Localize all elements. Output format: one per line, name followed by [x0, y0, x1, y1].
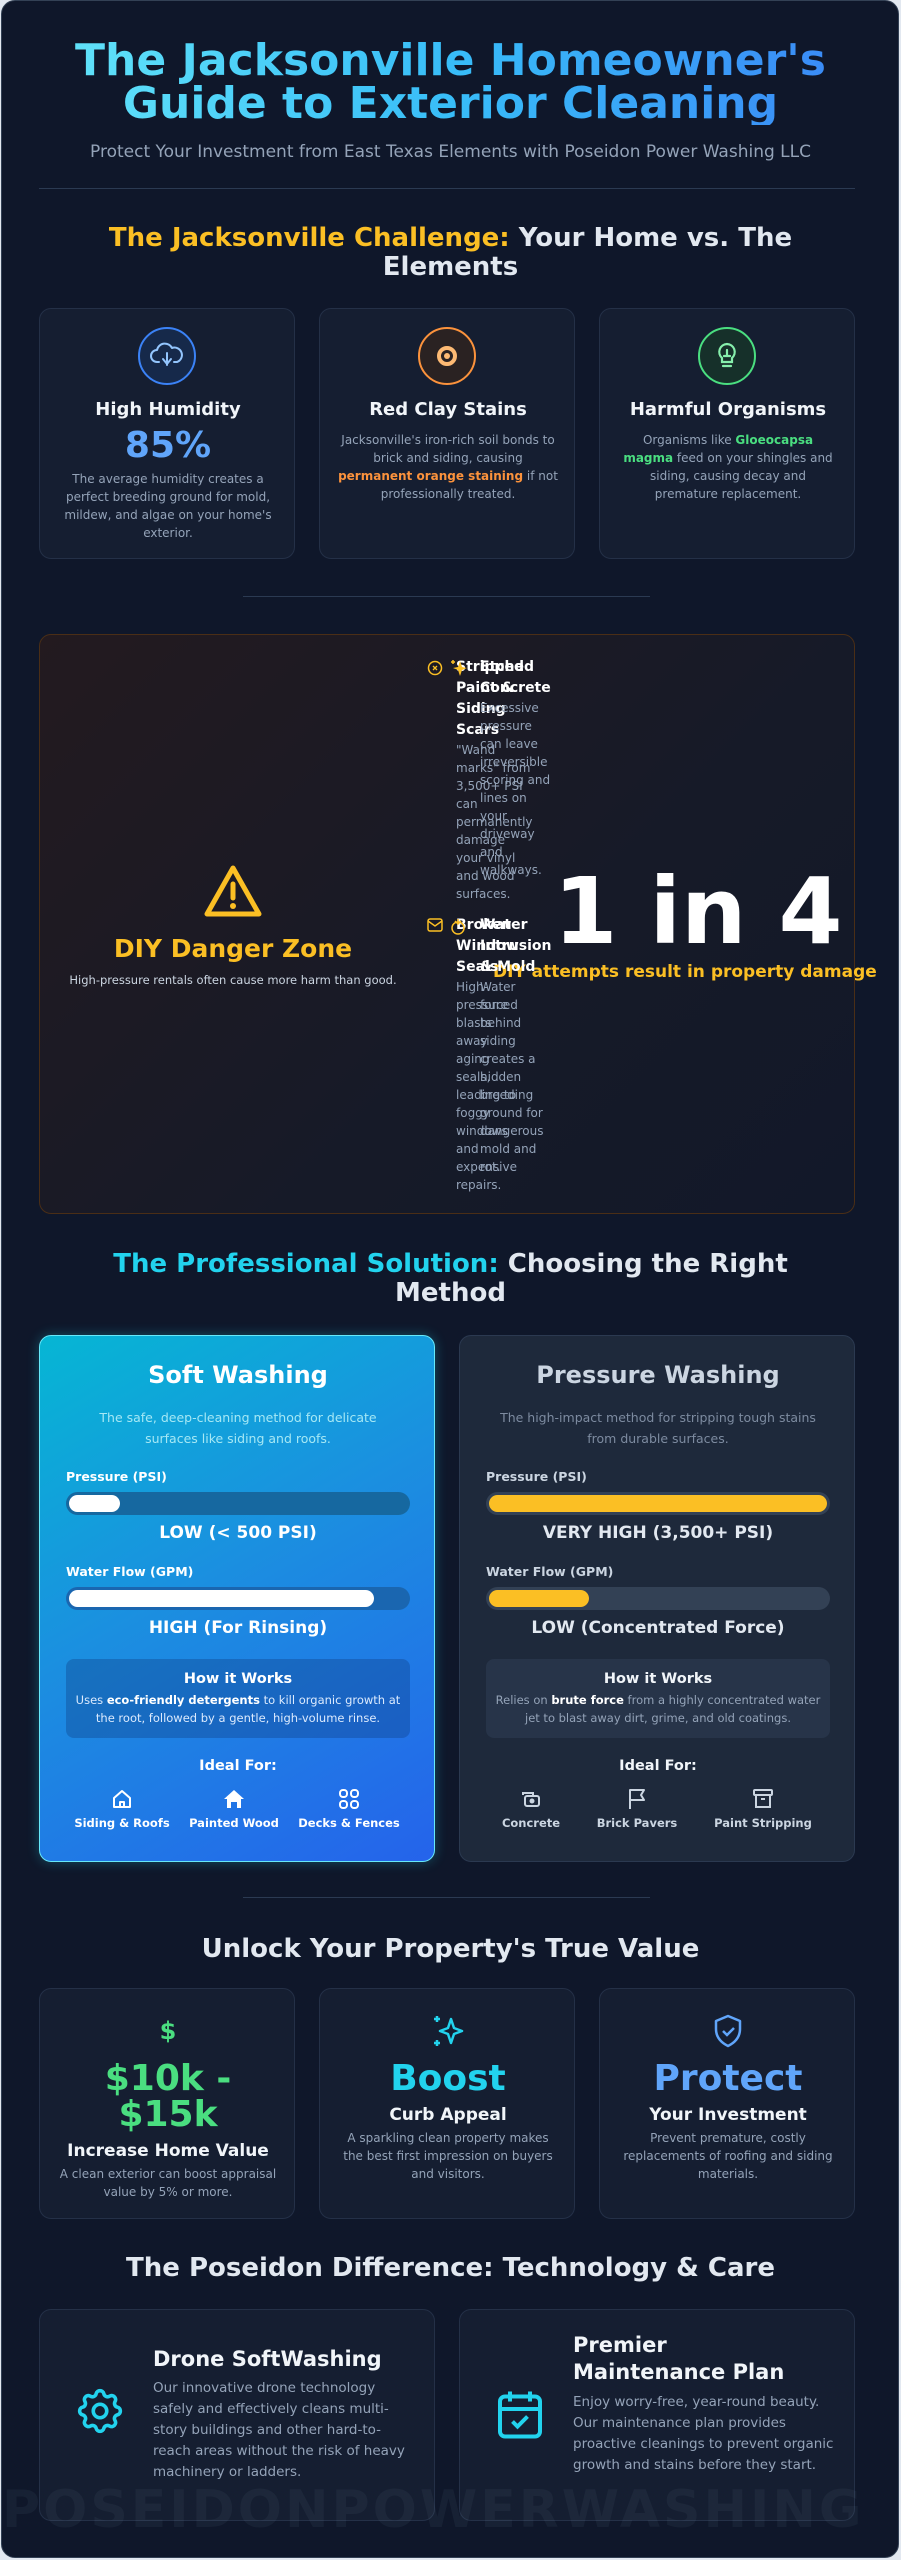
stat: Boost	[390, 2058, 506, 2099]
item: etched concrete	[451, 659, 551, 877]
stat caption: DIY attempts result in property damage	[493, 962, 877, 982]
panel: DIY danger zone	[39, 634, 855, 1214]
icon: sparkle	[451, 660, 467, 676]
water flow meter: Water Flow (GPM)	[486, 1564, 613, 1579]
icon: painted wood	[189, 1790, 279, 1830]
item: etched concrete: Excessive pressure can leave irreversible scoring and lines on your driveway and walkways.	[480, 701, 550, 877]
stat: Protect	[653, 2058, 803, 2099]
item: water intrusion: Water Intrusion & Mold	[480, 917, 551, 975]
icon: shield	[714, 2014, 742, 2048]
stat: $10k -	[105, 2058, 231, 2099]
water flow meter	[66, 1564, 410, 1638]
item: broken window seals: Broken Window Seals	[456, 917, 519, 975]
icon: siding & roofs	[74, 1790, 170, 1830]
pressure meter: VERY HIGH (3,500+ PSI)	[543, 1523, 773, 1543]
panel: pressure washing	[459, 1335, 855, 1862]
water flow meter	[486, 1564, 830, 1638]
description: The average humidity creates a perfect breeding ground for mold, mildew, and algae on your home's exterior.	[64, 472, 272, 540]
stat	[105, 2058, 231, 2135]
description: The high-impact method for stripping tough stains from durable surfaces.	[500, 1410, 816, 1446]
how it works box: How it Works	[604, 1671, 712, 1687]
title: Pressure Washing	[536, 1361, 780, 1389]
title: Increase Home Value	[67, 2141, 269, 2161]
card title: High Humidity	[95, 399, 241, 420]
title: The Jacksonville Homeowner's	[75, 35, 826, 86]
water flow meter: HIGH (For Rinsing)	[149, 1618, 327, 1638]
pressure meter	[486, 1469, 830, 1543]
description: Our innovative drone technology safely and effectively cleans multi-story buildings and other hard-to-reach areas without the risk of heavy machinery or ladders.	[153, 2380, 405, 2480]
icon: sparkles	[434, 2016, 464, 2046]
item: broken window seals: High-pressure blasts away aging seals, leading to foggy windows and expensive repairs.	[456, 980, 517, 1192]
title: Your Investment	[649, 2105, 807, 2125]
ideal for: Ideal For:	[619, 1758, 697, 1774]
icon: concrete: Concrete	[502, 1816, 560, 1830]
how it works box: How it Works	[184, 1671, 292, 1687]
danger subtitle: High-pressure rentals often cause more harm than good.	[69, 973, 397, 987]
panel: curb appeal	[319, 1988, 575, 2219]
panel: drone softwashing	[39, 2309, 435, 2521]
icon: brick pavers	[597, 1789, 677, 1830]
stat: 1 in 4: 1 in 4	[553, 858, 843, 965]
title	[0, 39, 901, 125]
item: etched concrete: Etched Concrete	[480, 659, 551, 696]
panel: red clay	[319, 308, 575, 559]
icon: gear	[78, 2388, 122, 2434]
water flow meter: Water Flow (GPM)	[66, 1564, 193, 1579]
pressure meter	[66, 1469, 410, 1543]
icon: target	[418, 327, 476, 385]
icon: siding & roofs: Siding & Roofs	[74, 1816, 170, 1830]
item: stripped paint: Stripped Paint & Siding Scars	[456, 659, 524, 738]
pressure meter: Pressure (PSI)	[66, 1469, 167, 1484]
title: Guide to Exterior Cleaning	[123, 78, 778, 129]
pressure meter: Pressure (PSI)	[486, 1469, 587, 1484]
how it works box	[66, 1659, 410, 1738]
description: A clean exterior can boost appraisal value by 5% or more.	[60, 2167, 276, 2199]
heading: unlock value: Unlock Your Property's True Value	[202, 1934, 699, 1964]
heading: DIY danger zone: DIY Danger Zone	[114, 934, 352, 963]
icon: warning	[204, 866, 262, 916]
panel: organisms	[599, 308, 855, 559]
ideal for: Ideal For:	[199, 1758, 277, 1774]
title: Curb Appeal	[389, 2105, 507, 2125]
item: stripped paint	[428, 659, 532, 901]
stat: $15k	[118, 2094, 218, 2135]
stat 85%: 85%	[125, 425, 211, 466]
icon: dollar: $	[160, 2017, 176, 2045]
panel: soft washing	[39, 1335, 435, 1862]
icon: paint stripping	[714, 1789, 812, 1830]
item: water intrusion: Water forced behind siding creates a hidden breeding ground for dangerous mold and rot.	[480, 980, 543, 1174]
description: Enjoy worry-free, year-round beauty. Our maintenance plan provides proactive cleanings to prevent organic growth and stains before they start.	[573, 2394, 833, 2473]
description: Prevent premature, costly replacements of roofing and siding materials.	[623, 2131, 833, 2181]
card title: Harmful Organisms	[630, 399, 826, 420]
title: Premier Maintenance Plan	[573, 2333, 784, 2384]
icon: calendar	[498, 2392, 542, 2438]
icon: bug	[451, 919, 465, 935]
item: broken window seals	[427, 917, 519, 1192]
panel: high humidity	[39, 308, 295, 559]
description: Jacksonville's iron-rich soil bonds to brick and siding, causing permanent orange staining if not professionally treated.	[338, 433, 558, 501]
card title: Red Clay Stains	[369, 399, 527, 420]
title: Drone SoftWashing	[153, 2347, 382, 2371]
pressure meter: LOW (< 500 PSI)	[159, 1523, 317, 1543]
heading: poseidon difference: The Poseidon Difference: Technology & Care	[126, 2253, 775, 2283]
panel: home value	[39, 1988, 295, 2219]
subtitle: Protect Your Investment from East Texas Elements with Poseidon Power Washing LLC	[90, 142, 811, 162]
heading: professional solution: The Professional Solution: Choosing the Right Method	[113, 1249, 788, 1308]
heading: challenge: The Jacksonville Challenge: Your Home vs. The Elements	[109, 223, 792, 282]
panel: maintenance plan	[459, 2309, 855, 2521]
icon: decks & fences	[298, 1789, 400, 1830]
icon: bulb	[698, 327, 756, 385]
icon: envelope	[427, 918, 443, 932]
icon: painted wood: Painted Wood	[189, 1816, 279, 1830]
how it works box: Relies on brute force from a highly concentrated water jet to blast away dirt, grime, and old coatings.	[496, 1693, 820, 1725]
description: A sparkling clean property makes the best first impression on buyers and visitors.	[343, 2131, 553, 2181]
description: Organisms like Gloeocapsa magma feed on your shingles and siding, causing decay and premature replacement.	[623, 433, 833, 501]
icon: circle x	[428, 660, 442, 676]
item: stripped paint: "Wand marks" from 3,500+ PSI can permanently damage your vinyl and wood surfaces.	[456, 743, 532, 901]
item: water intrusion	[451, 917, 551, 1174]
water flow meter: LOW (Concentrated Force)	[531, 1618, 785, 1638]
icon: cloud	[138, 327, 196, 385]
panel: protect	[599, 1988, 855, 2219]
icon: paint stripping: Paint Stripping	[714, 1816, 812, 1830]
icon: brick pavers: Brick Pavers	[597, 1816, 677, 1830]
icon: concrete	[502, 1792, 560, 1830]
how it works box: Uses eco-friendly detergents to kill organic growth at the root, followed by a gentle, high-volume rinse.	[76, 1693, 400, 1725]
title: Soft Washing	[148, 1361, 328, 1389]
icon: decks & fences: Decks & Fences	[298, 1816, 400, 1830]
how it works box	[486, 1659, 830, 1738]
description: The safe, deep-cleaning method for delicate surfaces like siding and roofs.	[99, 1410, 377, 1446]
